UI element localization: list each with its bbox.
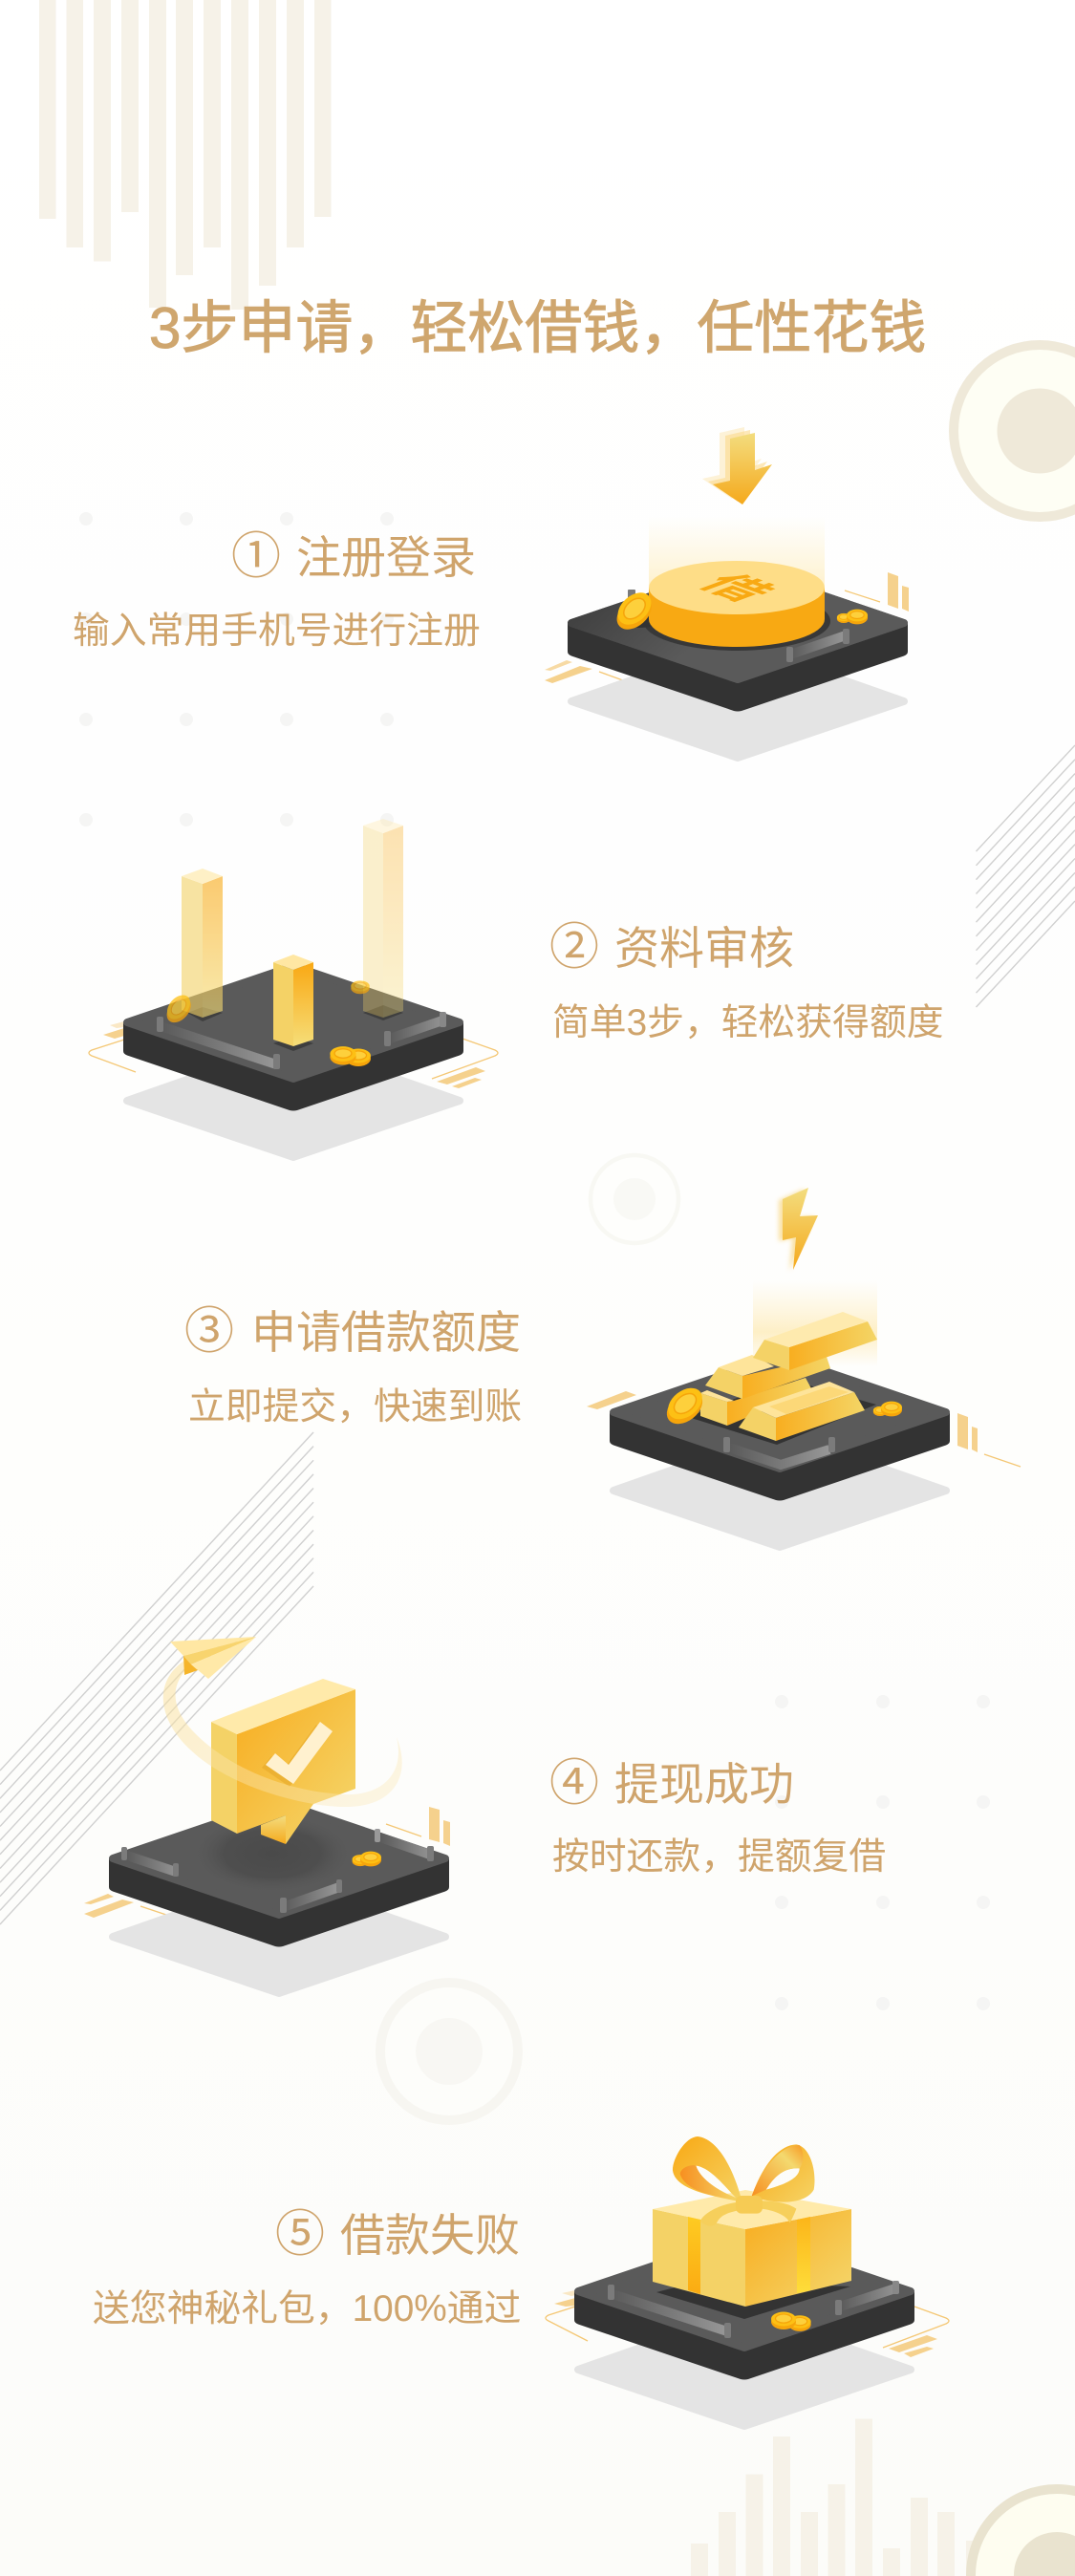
step 1 description: 输入常用手机号进行注册 [73,611,481,652]
gift box [653,2190,851,2307]
step 1 heading: 注册登录 [296,532,476,583]
step 4 description: 按时还款，提额复借 [552,1836,886,1878]
recess [688,1379,876,1445]
check sign [211,1679,355,1844]
paper plane [170,1637,256,1679]
accents step 3 [587,1391,1021,1467]
disc recess [643,591,830,651]
glow [753,1280,877,1366]
rails [121,1829,434,1913]
decorative bars top [39,0,331,310]
step 5 heading: 借款失败 [340,2210,520,2261]
step 1 heading: ① [231,529,281,585]
illustration: step 1 platform with coin disc [545,427,909,758]
accents step 2 [89,1021,498,1088]
coin left [609,587,659,636]
step 2 heading: ② [549,920,599,976]
rail [628,590,849,662]
coins [771,2312,811,2331]
coins [659,1382,902,1430]
dot grid step 4 [775,1695,990,2010]
gold bar top [753,1312,877,1370]
coins [161,980,371,1066]
step 2 heading: 资料审核 [614,923,794,974]
platform [568,567,908,758]
bow [673,2136,815,2226]
illustration: step 4 platform with check sign [84,1637,450,1993]
decorative circle right [954,345,1075,517]
step 4 heading: ④ [549,1756,599,1812]
step 2 description: 简单3步，轻松获得额度 [552,1002,944,1043]
gift shadow [656,2281,850,2319]
rail [723,1437,835,1465]
hatching left [0,1432,313,1924]
platform [123,966,463,1157]
gold bar front [739,1382,865,1441]
dot grid step 1 [79,512,394,826]
bar left [182,869,223,1018]
bar middle [273,955,313,1046]
decorative bars bottom [691,2419,983,2576]
decorative circle bottom right [971,2489,1075,2576]
platform [610,1356,950,1547]
gold bar lower back [700,1378,812,1426]
platform shade [571,567,904,679]
title: 3步申请，轻松借钱，任性花钱 [149,296,926,360]
sign shadow [191,1814,354,1894]
accents step 4 [84,1807,450,1918]
hatching right [977,745,1075,1007]
decorative circle medium [380,1983,518,2120]
accents step 1 [545,572,909,684]
bolt [779,1188,818,1271]
gold bar middle [705,1355,830,1399]
platform [109,1802,449,1993]
check mark [262,1725,329,1787]
coins [353,1852,381,1866]
coins right [837,610,868,624]
bar right [363,819,403,1018]
step 3 heading: 申请借款额度 [251,1307,521,1358]
arrow [702,427,772,504]
decorative circle small [591,1155,678,1243]
swoosh [163,1661,402,1807]
accents step 5 [546,2290,949,2357]
platform [574,2235,914,2426]
rails [608,2281,899,2338]
disc [649,561,825,647]
illustration: step 2 platform with bars [89,819,498,1157]
step 4 heading: 提现成功 [614,1759,794,1810]
step 3 heading: ③ [184,1304,234,1360]
step 5 description: 送您神秘礼包，100%通过 [93,2288,521,2329]
illustration: step 3 platform with gold bars [587,1188,1021,1547]
illustration: step 5 platform with gift [546,2136,949,2426]
glow [649,516,825,590]
step 5 heading: ⑤ [275,2207,325,2263]
disc character: 借 [686,570,785,607]
step 3 description: 立即提交，快速到账 [188,1386,522,1428]
coin shadow [619,618,657,628]
bar shadows [187,1005,403,1051]
rails [157,1012,446,1069]
